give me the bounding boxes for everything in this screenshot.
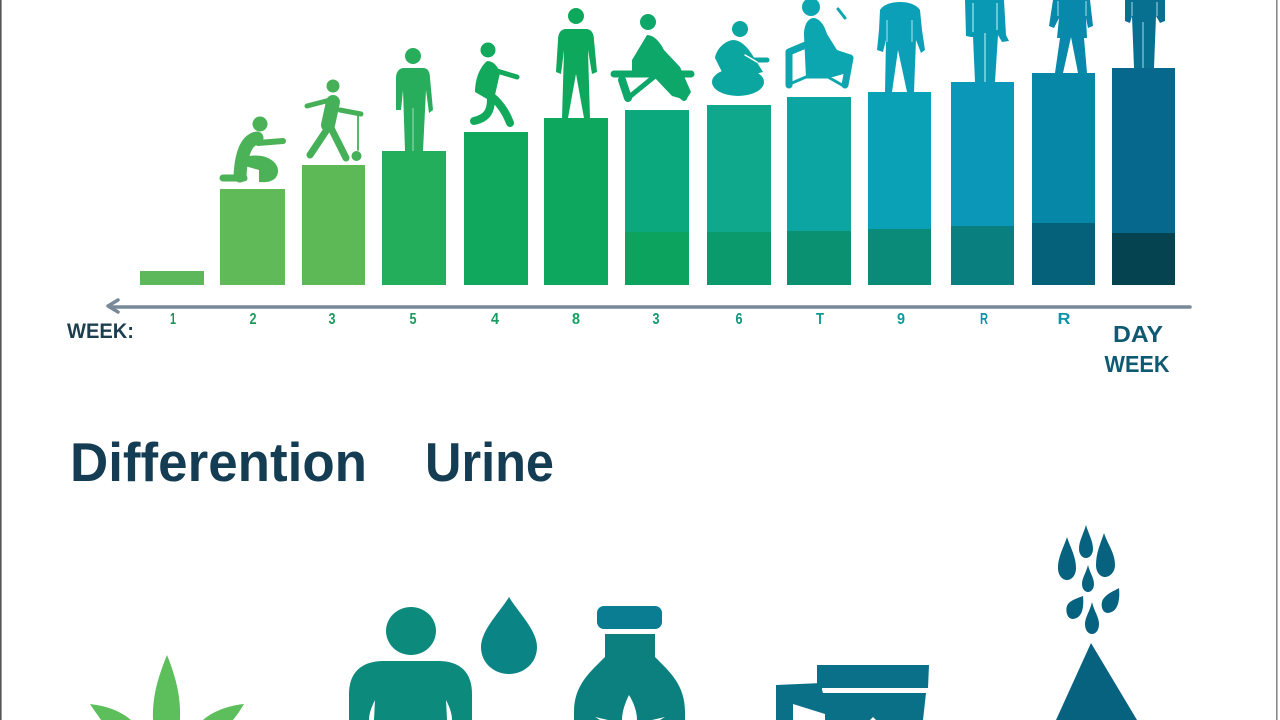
bar chart: weekly bars bbox=[140, 68, 1175, 285]
icon: large droplet bbox=[1056, 643, 1137, 720]
week number labels: R bbox=[1058, 311, 1071, 328]
week number labels: 3 bbox=[652, 311, 660, 328]
figure 6: sitting on bench bbox=[614, 14, 691, 100]
week number labels: 8 bbox=[572, 311, 580, 328]
heading: Urine bbox=[425, 431, 554, 493]
figure 5: standing bbox=[556, 8, 597, 118]
figure 7: seated on cushion bbox=[712, 21, 767, 96]
figure 9: standing bbox=[877, 2, 925, 92]
figures standing on the bars bbox=[223, 0, 1165, 182]
week number labels bbox=[170, 311, 1071, 328]
axis arrow bbox=[108, 300, 1190, 312]
icon: person bbox=[349, 607, 472, 720]
axis label: WEEK: WEEK: bbox=[67, 320, 134, 343]
heading: Differention bbox=[70, 431, 367, 493]
icon: bottle bbox=[574, 606, 685, 720]
figure 3: standing bbox=[396, 48, 433, 151]
figure 11: standing, cropped at top bbox=[1049, 0, 1093, 73]
figure 8: crouching bbox=[789, 0, 852, 85]
icon: cannabis leaf bbox=[90, 655, 244, 720]
icon: water drop bbox=[481, 597, 537, 674]
week number labels: T bbox=[816, 311, 824, 328]
axis label: DAY WEEK: DAY bbox=[1113, 321, 1163, 347]
figure 2: walking with cane bbox=[307, 80, 362, 161]
axis label: DAY WEEK: WEEK bbox=[1104, 351, 1170, 377]
axis label: DAY WEEK bbox=[1104, 321, 1170, 377]
week number labels: 3 bbox=[328, 311, 336, 328]
week number labels: 5 bbox=[410, 311, 417, 328]
week number labels: 9 bbox=[897, 311, 905, 328]
week number labels: 6 bbox=[736, 311, 743, 328]
figure 12: standing, cropped at top bbox=[1125, 0, 1165, 68]
heading bbox=[70, 431, 554, 493]
week number labels: R bbox=[980, 311, 988, 328]
icon: jug bbox=[776, 665, 929, 720]
figure 4: stepping bbox=[474, 42, 517, 123]
figure 1: kneeling on ball bbox=[223, 116, 283, 182]
figure 10: standing, cropped at top bbox=[965, 0, 1009, 82]
icon: falling droplets bbox=[1058, 525, 1119, 634]
week number labels: 2 bbox=[250, 311, 257, 328]
week number labels: 1 bbox=[170, 311, 176, 328]
week number labels: 4 bbox=[491, 311, 499, 328]
